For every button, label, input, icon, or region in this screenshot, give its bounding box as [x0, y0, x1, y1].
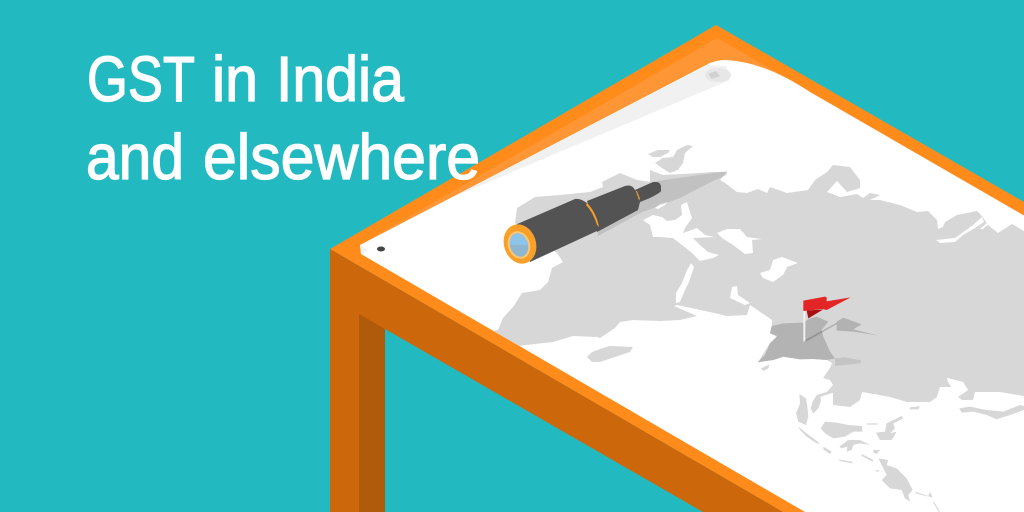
- paper pin hole: [377, 246, 385, 252]
- telescope glass: [510, 233, 528, 257]
- world map: [490, 145, 1024, 512]
- paper curl shadow: [360, 65, 731, 254]
- flag shadow: [805, 318, 878, 342]
- telescope middle band: [636, 191, 640, 200]
- Japan-like island arc: [959, 405, 1024, 419]
- telescope main body: [515, 199, 597, 262]
- telescope orange band: [586, 203, 599, 227]
- title word: GST: GST: [87, 43, 195, 115]
- title word: elsewhere: elsewhere: [203, 121, 480, 193]
- table: [330, 25, 1024, 512]
- telescope middle tube: [587, 186, 640, 232]
- India highlighted: [758, 317, 862, 371]
- paper sheet: [360, 60, 1024, 512]
- Eurasia and Africa landmass: [490, 165, 1024, 407]
- flag tail: [820, 297, 851, 310]
- Britain: [648, 150, 670, 157]
- south-east Asian islands: [796, 390, 940, 512]
- flag marker: [803, 297, 878, 342]
- seas cut into the land: [643, 202, 991, 397]
- telescope: [499, 182, 661, 268]
- table front apron and leg: [330, 249, 783, 512]
- title word: India: India: [276, 43, 404, 115]
- Scandinavia: [655, 145, 693, 173]
- table top surface: [330, 25, 1024, 512]
- title: [86, 43, 480, 193]
- flag pole: [803, 310, 805, 342]
- table leg inner face: [359, 314, 385, 512]
- title word: in: in: [212, 43, 258, 115]
- telescope lens ring: [504, 228, 534, 262]
- Madagascar: [587, 346, 633, 362]
- flag front: [803, 297, 827, 311]
- telescope lens rim: [499, 220, 541, 268]
- flag fold: [807, 309, 823, 318]
- table top inner bevel: [360, 38, 1024, 247]
- telescope shadow: [597, 171, 727, 236]
- telescope eyepiece tube: [635, 182, 661, 202]
- title word: and: and: [86, 121, 184, 193]
